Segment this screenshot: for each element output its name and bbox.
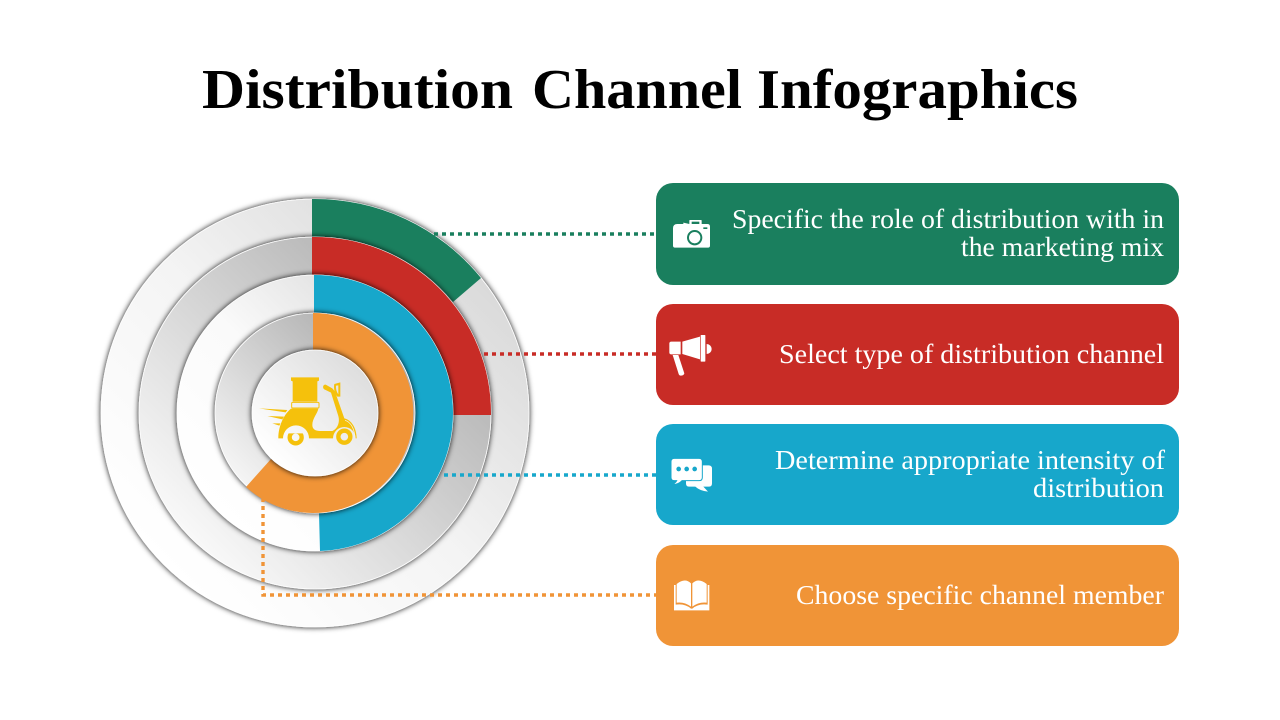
connector: orange — [263, 498, 656, 595]
title: Channel — [532, 59, 742, 121]
blue arc segment — [314, 275, 453, 551]
second ring — [139, 237, 491, 589]
outer ring — [101, 199, 529, 627]
panel: intensity of distribution — [656, 424, 1179, 525]
third ring — [177, 275, 453, 551]
text: type of channel: Select type of distribution channel — [779, 339, 1164, 369]
concentric ring chart — [101, 199, 529, 627]
title: Distribution — [202, 59, 513, 121]
red arc segment — [312, 237, 491, 415]
text: role of distribution: the marketing mix — [961, 232, 1165, 262]
icon: delivery scooter — [259, 377, 357, 443]
panel: type of channel — [656, 304, 1179, 405]
text: intensity of distribution: distribution — [1033, 473, 1165, 503]
title: Infographics — [757, 59, 1078, 121]
connector: red — [484, 352, 656, 356]
text: intensity of distribution: Determine appropriate intensity of — [775, 445, 1165, 475]
icon: megaphone — [669, 335, 712, 376]
icon: open book — [674, 580, 709, 610]
connector: blue — [444, 473, 656, 477]
title — [202, 59, 1078, 121]
orange arc segment — [246, 313, 413, 513]
connector: green — [434, 232, 656, 236]
text: role of distribution: Specific the role of distribution with in — [732, 204, 1165, 234]
green arc segment — [312, 199, 481, 302]
fourth ring — [215, 313, 415, 513]
panel: channel member — [656, 545, 1179, 646]
panel: role of distribution — [656, 183, 1179, 285]
center disc — [252, 350, 378, 476]
icon: chat bubbles — [671, 458, 712, 492]
text: channel member: Choose specific channel member — [796, 580, 1164, 610]
icon: camera — [673, 220, 710, 248]
